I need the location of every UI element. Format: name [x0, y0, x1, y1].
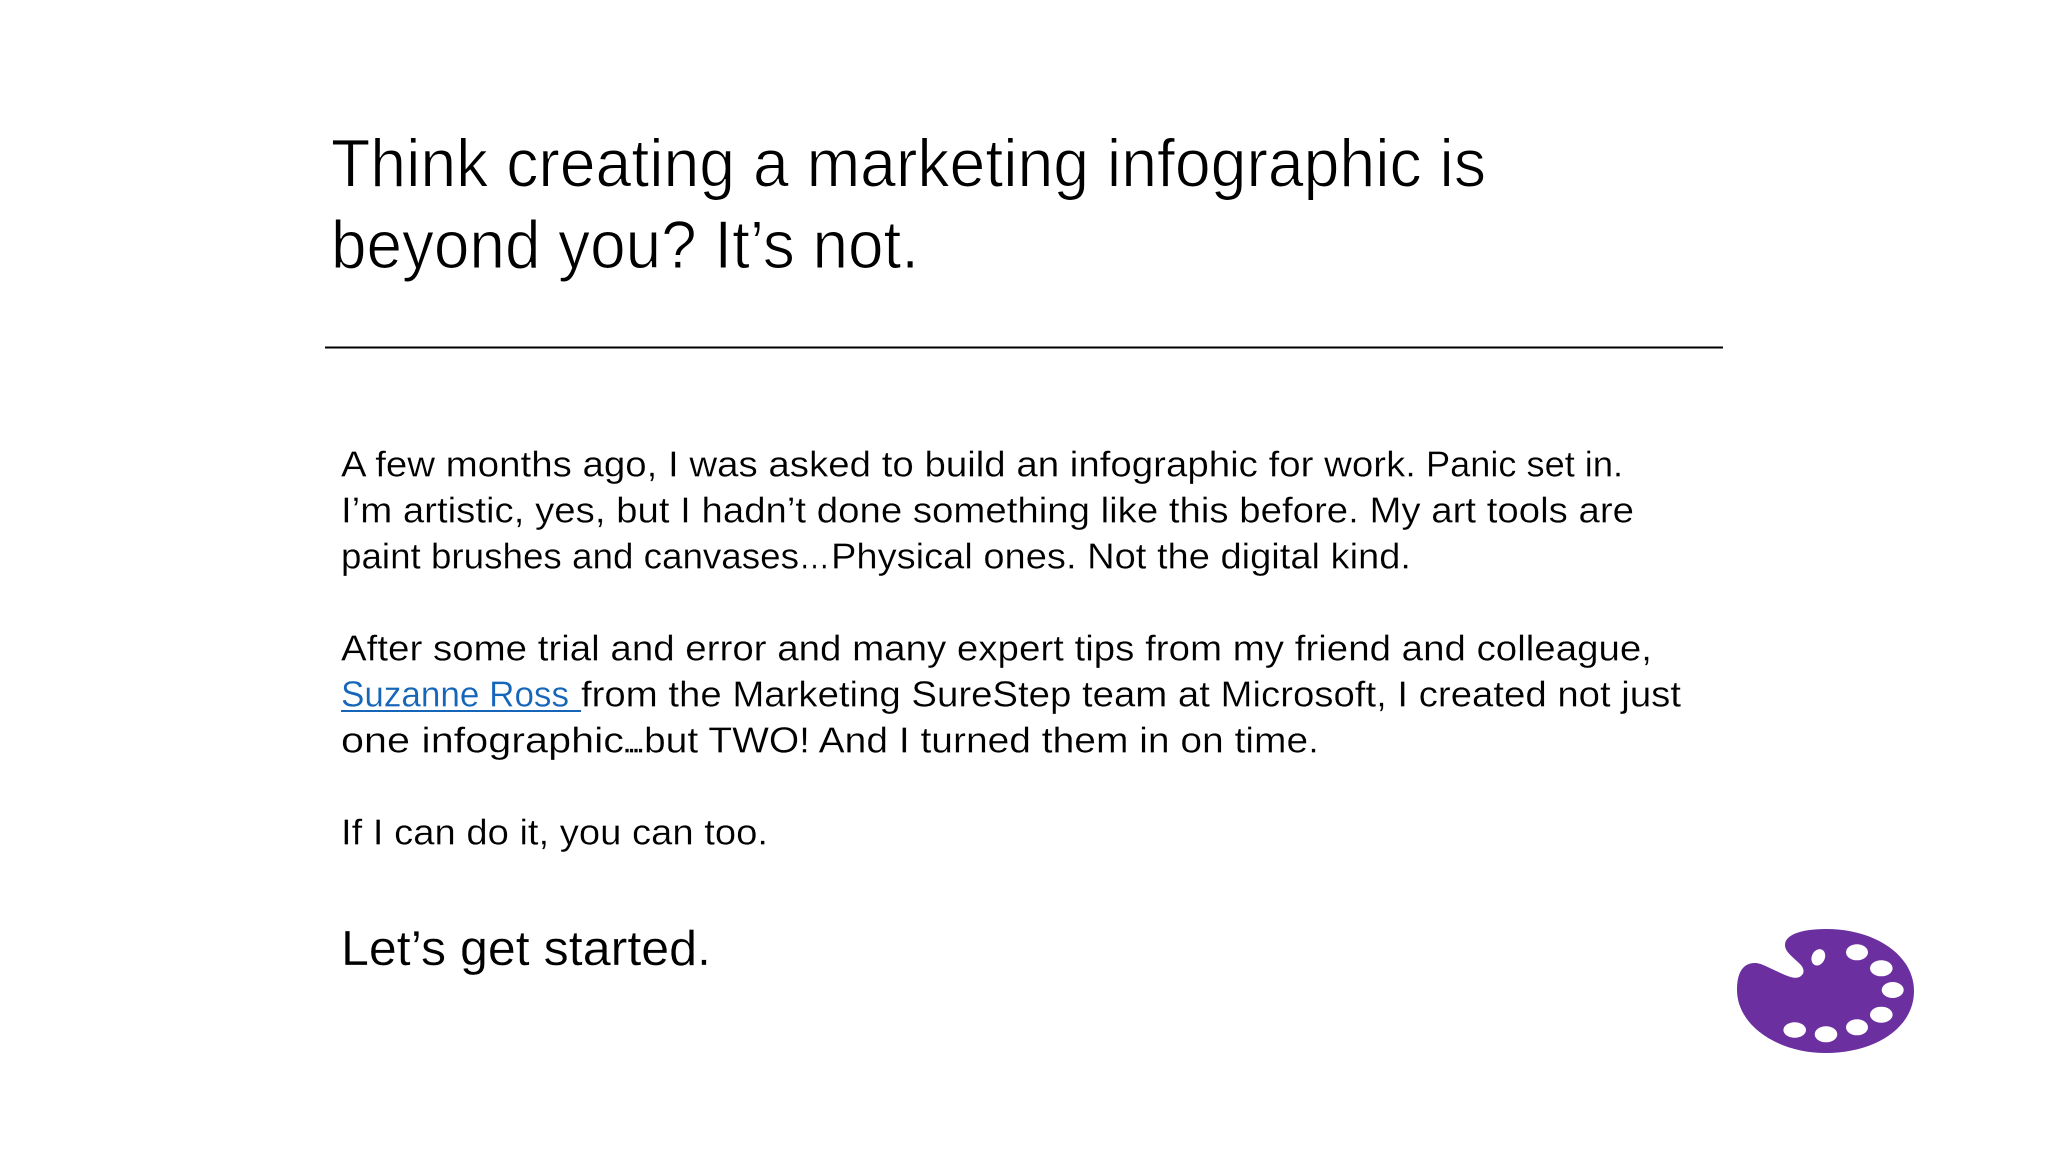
text block: intro paragraph: A few months ago, I was asked to build an infographic for work. — [341, 444, 1416, 485]
text block: second paragraph with link: After some trial and error and many expert tips from my friend and colleague, — [341, 628, 1652, 669]
text block: second paragraph with link: from the Marketing SureStep team at Microsoft, I created not just — [581, 674, 1681, 715]
title — [331, 126, 1486, 283]
title: Think creating a marketing infographic is — [331, 126, 1486, 202]
text block: second paragraph with link — [341, 628, 1681, 761]
call to action: Let’s get started. — [341, 922, 711, 976]
text block: second paragraph with link: Suzanne Ross — [341, 674, 569, 715]
text block: second paragraph with link: but TWO! And I turned them in on time. — [644, 720, 1319, 761]
title: beyond you? It’s not. — [331, 207, 919, 283]
text block: intro paragraph: … — [799, 536, 830, 577]
text block: intro paragraph: paint brushes and canvases — [341, 536, 799, 577]
icon: paint palette — [1737, 929, 1914, 1053]
text block: intro paragraph: I’m artistic, yes, but I hadn’t done something like this before. My art tools are — [341, 490, 1634, 531]
text block: intro paragraph: Physical ones. Not the digital kind. — [831, 536, 1411, 577]
text block: second paragraph with link: .... — [622, 720, 646, 761]
text block: intro paragraph — [341, 444, 1634, 577]
text block: second paragraph with link: one infographic — [341, 720, 624, 761]
text block: encouragement: If I can do it, you can too. — [341, 812, 768, 853]
text block: intro paragraph: Panic set in. — [1426, 444, 1623, 485]
